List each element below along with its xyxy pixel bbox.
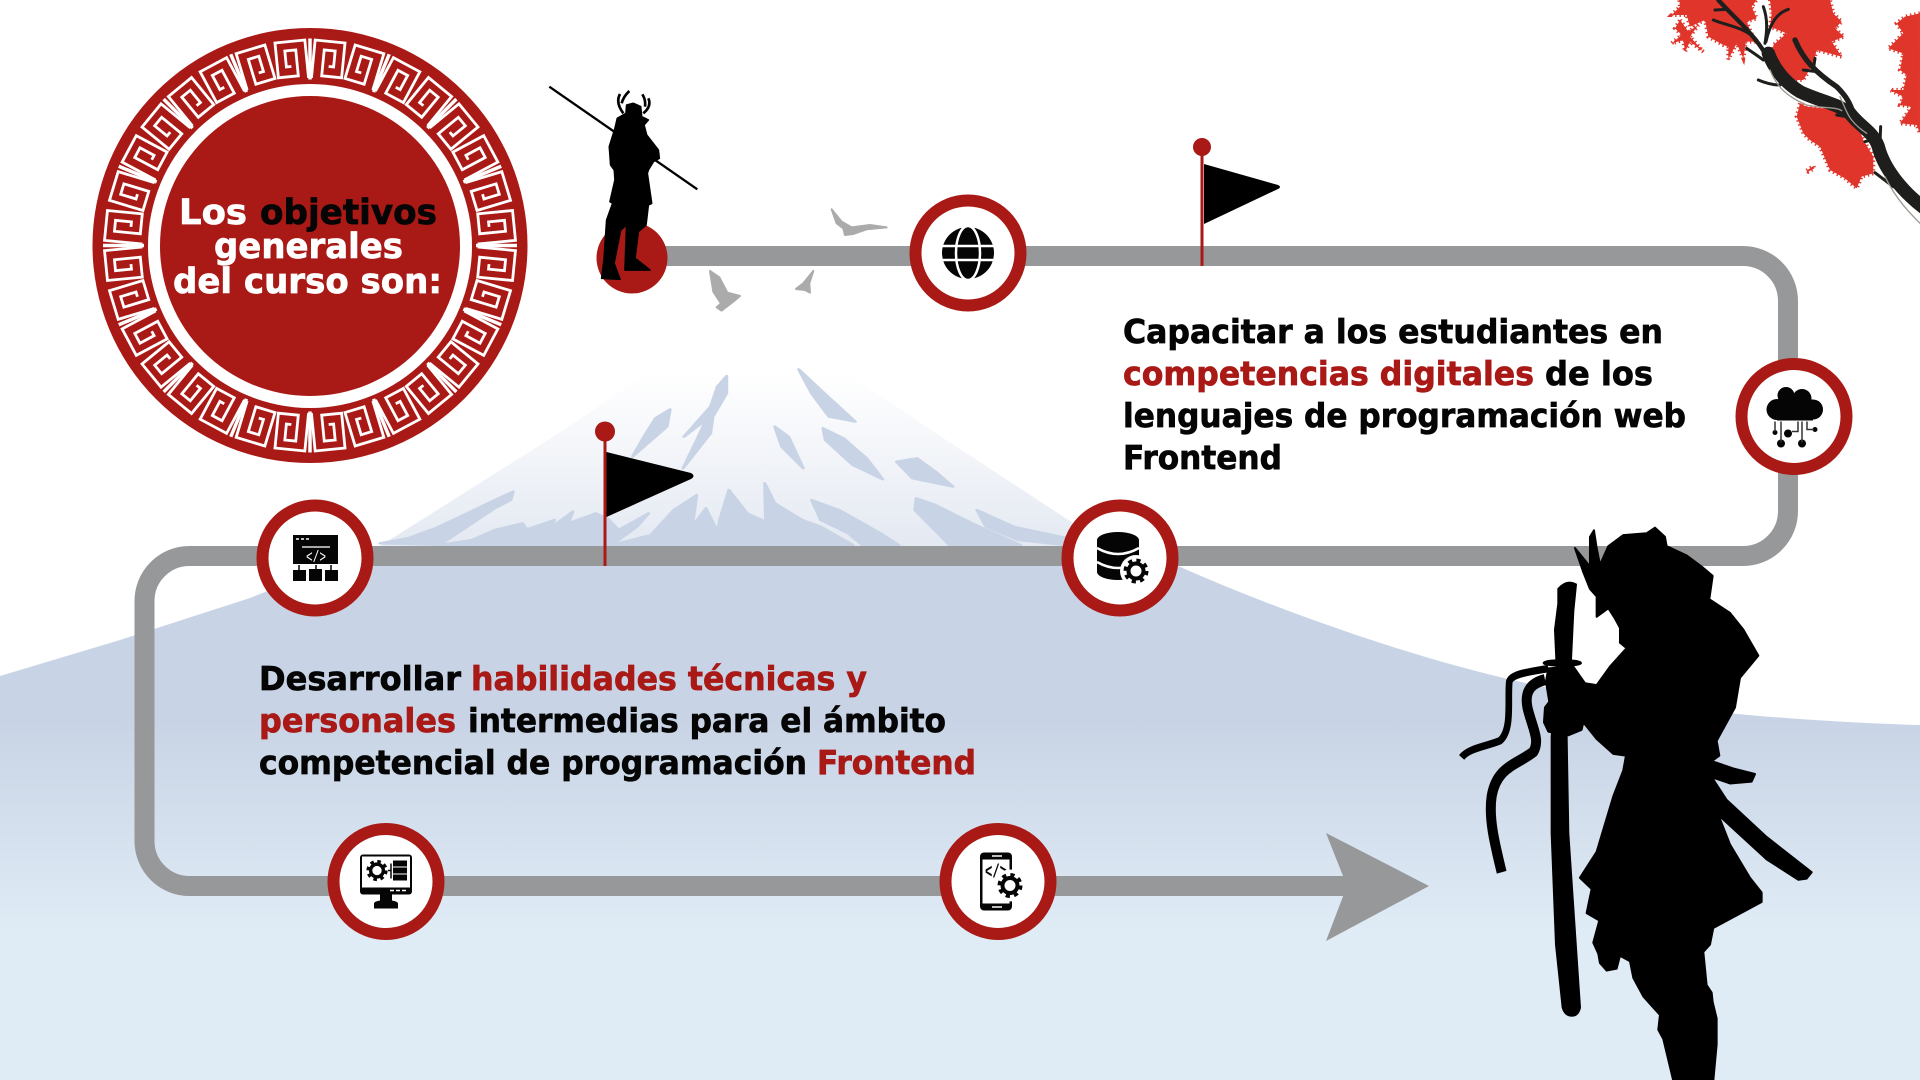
path arrow (144, 256, 1788, 941)
text block: objective 1: lenguajes de programación web (1123, 396, 1686, 435)
text block: objective 2: Desarrollar (259, 659, 462, 698)
node: database (1068, 506, 1172, 610)
text block: objective 2: competencial de programación (259, 743, 807, 782)
title text: del curso son: (173, 262, 442, 302)
branch (1713, 0, 1920, 223)
background ground hills (0, 540, 1920, 1080)
cherry tree branch (1672, 0, 1920, 223)
node: cloud (1742, 364, 1846, 469)
small samurai with spear (549, 87, 697, 279)
start dot (596, 222, 668, 294)
node: phone code settings (946, 829, 1050, 934)
text block: objective 2: habilidades técnicas y (471, 659, 867, 698)
title text: objetivos (260, 193, 437, 233)
mountain snow streaks (380, 369, 1069, 545)
node: code window (262, 506, 368, 610)
node: globe (916, 200, 1020, 306)
flag lower (595, 422, 694, 566)
mountain (380, 343, 1090, 546)
flag upper (1193, 138, 1280, 266)
birds (710, 209, 887, 311)
meander ring (103, 38, 517, 452)
node: code window: </> (306, 549, 326, 568)
title text: generales (214, 227, 403, 267)
title text: Los (179, 193, 247, 233)
large samurai with sword (1462, 528, 1812, 1080)
text block: objective 1: Capacitar a los estudiantes en (1123, 312, 1663, 351)
text block: objective 1: de los (1545, 354, 1653, 393)
node: phone code settings: </> (985, 862, 1007, 884)
text block: objective 2 (259, 659, 976, 782)
text block: objective 1 (1123, 312, 1686, 477)
title medallion (92, 28, 528, 463)
node: monitor settings (334, 829, 438, 934)
text block: objective 2: Frontend (817, 743, 976, 782)
title text (173, 193, 442, 302)
text block: objective 2: personales (259, 701, 456, 740)
red foliage (1672, 0, 1920, 188)
text block: objective 1: competencias digitales (1123, 354, 1534, 393)
text block: objective 1: Frontend (1123, 438, 1282, 477)
text block: objective 2: intermedias para el ámbito (468, 701, 946, 740)
